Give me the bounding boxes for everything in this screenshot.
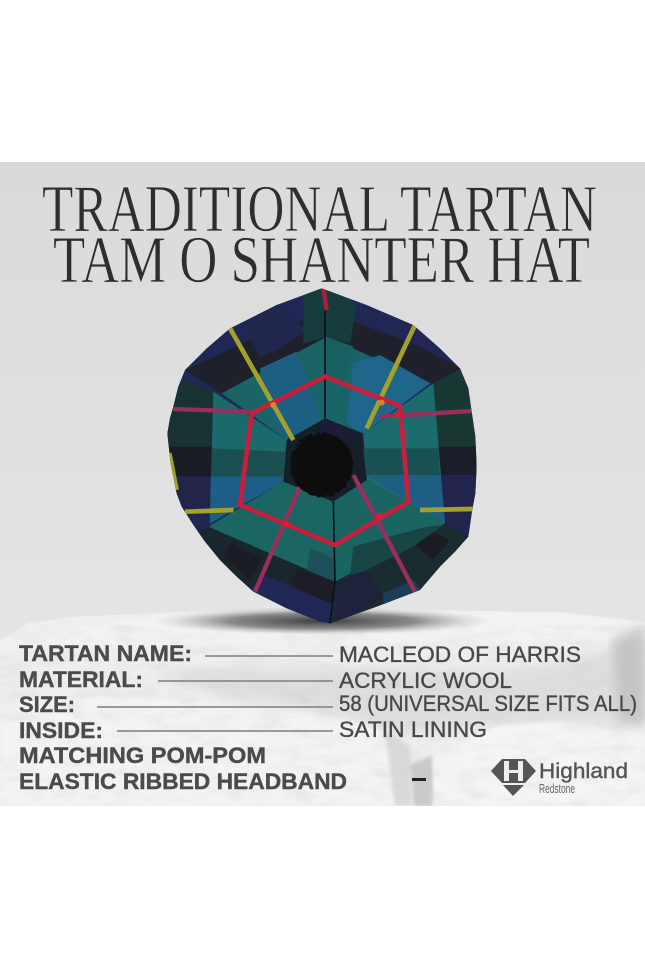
pink red stripes — [173, 288, 472, 592]
specification labels — [19, 641, 347, 794]
logo: Highland Redstone: Redstone — [539, 781, 575, 796]
specification labels: INSIDE: — [19, 718, 103, 743]
teal panels — [222, 337, 430, 440]
centre dark panel — [283, 418, 367, 502]
seams — [325, 310, 335, 623]
specification labels: MATCHING POM-POM — [19, 743, 266, 768]
specification values: MACLEOD OF HARRIS — [339, 642, 581, 667]
lower outer band — [193, 527, 335, 625]
logo: Highland Redstone — [491, 759, 628, 796]
hat shadow — [152, 607, 492, 635]
yellow stripes — [169, 325, 473, 512]
specification values — [339, 642, 637, 742]
hat: tartan tam — [167, 288, 477, 624]
specification values: ACRYLIC WOOL — [339, 668, 512, 693]
stripe crossings — [270, 400, 401, 527]
specification labels: ELASTIC RIBBED HEADBAND — [19, 769, 347, 794]
specification labels: SIZE: — [19, 692, 75, 717]
specification values: SATIN LINING — [339, 717, 487, 742]
specification labels: MATERIAL: — [19, 667, 143, 692]
title — [42, 172, 597, 297]
hat base — [167, 288, 477, 623]
logo: Highland Redstone: Highland — [539, 760, 628, 783]
background panel — [0, 162, 645, 806]
pom-pom — [290, 433, 353, 497]
leader lines — [97, 656, 333, 731]
red hexagon stripes — [240, 377, 408, 545]
specification labels: TARTAN NAME: — [19, 641, 192, 666]
rock pedestal — [0, 605, 645, 806]
